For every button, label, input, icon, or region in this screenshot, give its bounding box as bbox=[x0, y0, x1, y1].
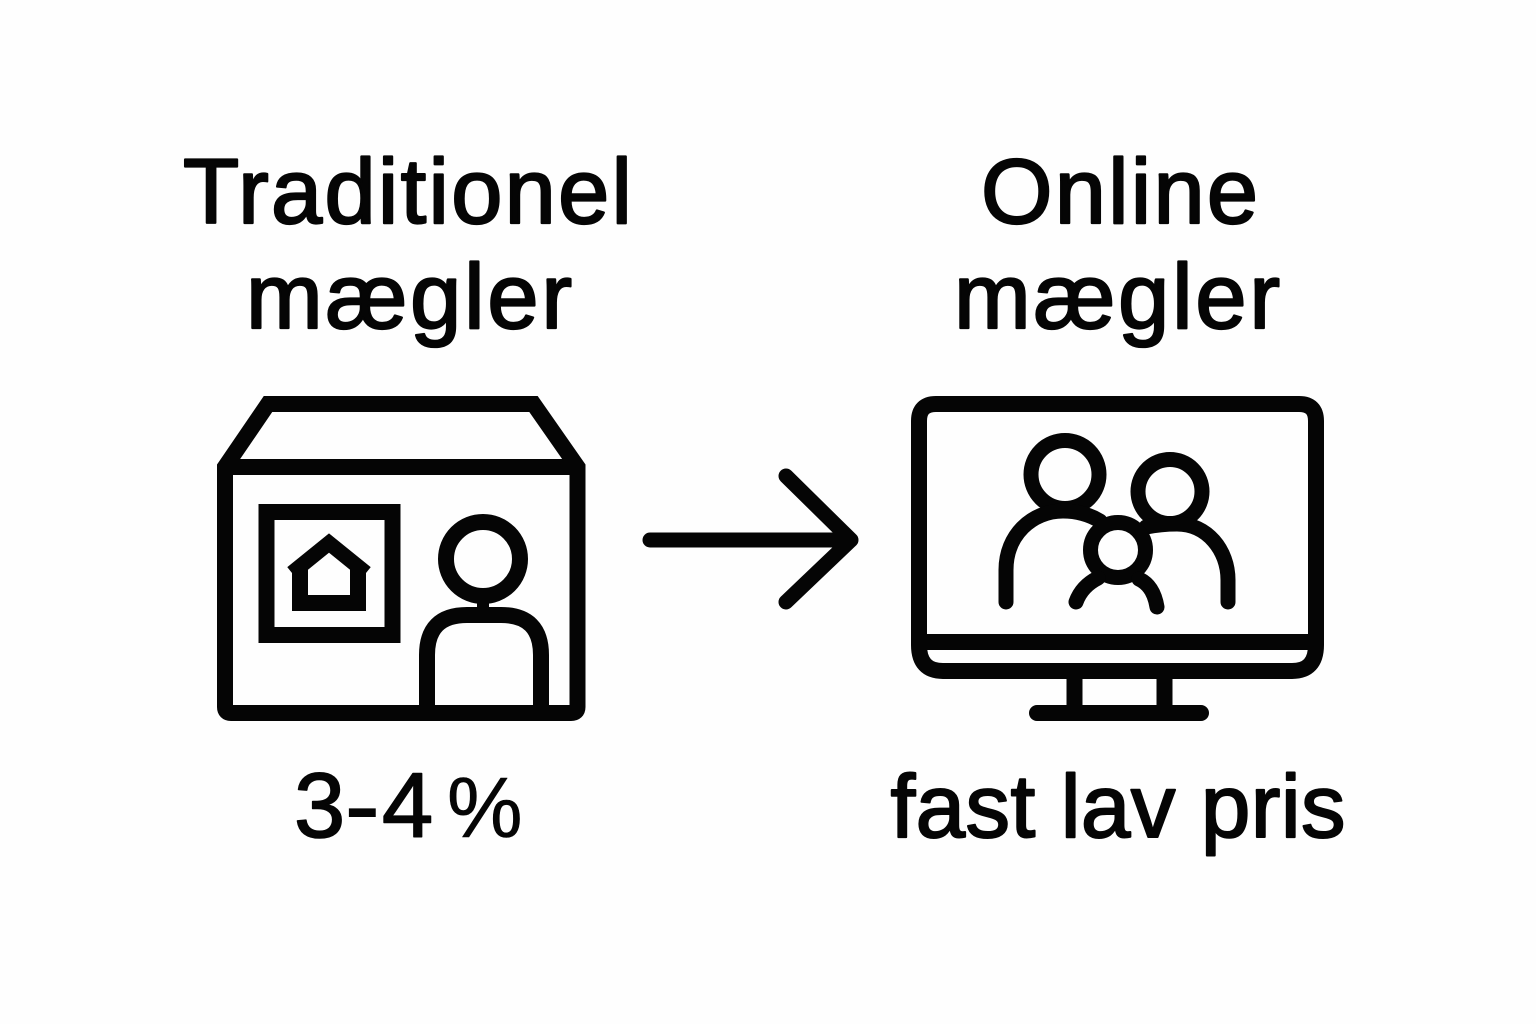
icon: monitor with family bbox=[919, 404, 1316, 713]
label: traditional fee: 4 bbox=[382, 755, 433, 857]
heading: traditionel maegler: Traditionel bbox=[183, 141, 632, 243]
child bbox=[1076, 522, 1157, 607]
icon: real estate office with agent bbox=[225, 404, 578, 713]
adult right bbox=[1138, 460, 1228, 602]
heading: traditionel maegler: mægler bbox=[246, 246, 572, 348]
label: traditional fee: - bbox=[344, 743, 381, 866]
heading: online maegler: Online bbox=[981, 141, 1258, 243]
heading: online maegler: mægler bbox=[954, 246, 1280, 348]
label: traditional fee: 3 bbox=[294, 755, 345, 857]
heading: online maegler bbox=[954, 141, 1280, 348]
label: traditional fee: % bbox=[447, 761, 523, 856]
label: online price: fast lav pris bbox=[890, 756, 1346, 856]
heading: traditionel maegler bbox=[183, 141, 632, 348]
adult left bbox=[1006, 440, 1100, 602]
arrow bbox=[650, 476, 851, 602]
